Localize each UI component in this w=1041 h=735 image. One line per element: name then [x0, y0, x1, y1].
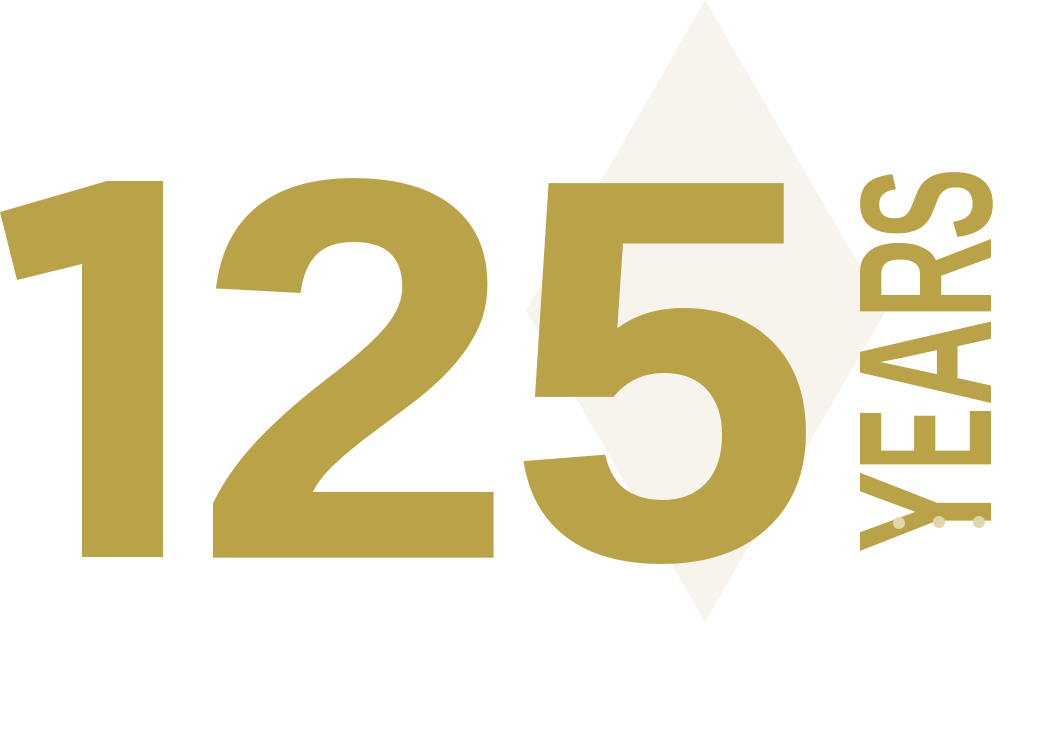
decorative dots	[893, 516, 985, 529]
numeral 125	[0, 174, 978, 564]
vertical word YEARS: R	[820, 237, 1032, 319]
vertical word YEARS: E	[819, 407, 1031, 471]
vertical word YEARS: A	[818, 318, 1032, 406]
digit 5: 5	[510, 69, 819, 670]
vertical word YEARS: S	[822, 168, 1031, 240]
background diamond	[526, 0, 886, 622]
vertical word YEARS	[818, 168, 1032, 553]
digit 2: 2	[196, 71, 514, 669]
vertical word YEARS: Y	[819, 471, 1031, 553]
